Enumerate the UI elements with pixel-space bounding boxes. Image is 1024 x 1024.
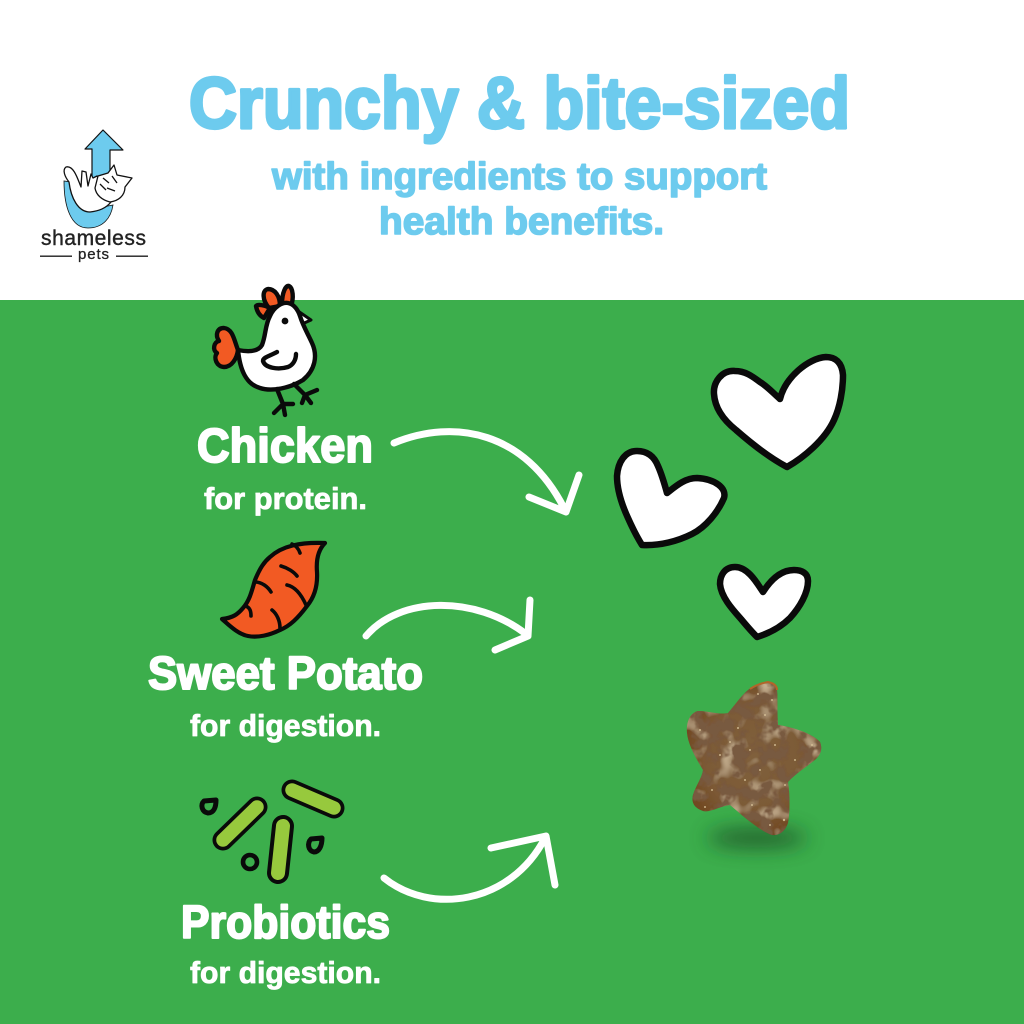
subheading line 2: health benefits.: [379, 201, 664, 243]
chicken legs: [274, 384, 317, 415]
arrow: sweet potato to hearts: [366, 600, 530, 650]
chicken comb petal 1: [264, 289, 280, 308]
label: probiotics: Probiotics: [181, 896, 390, 948]
label: for digestion: for digestion.: [190, 708, 381, 743]
chicken tail: [214, 328, 238, 367]
potato body: [222, 543, 325, 637]
icon: chicken: [214, 286, 317, 415]
kibble body: [687, 682, 821, 835]
chicken eye: [284, 320, 286, 322]
label: sweet potato: Sweet Potato: [148, 647, 423, 699]
hearts: [617, 357, 843, 637]
spore top left: [202, 800, 216, 813]
spore right: [309, 838, 322, 852]
cat head: [95, 165, 132, 202]
logo: wordmark shameless: shameless: [41, 227, 146, 250]
kibble shadow: [707, 828, 807, 848]
potato marks: [246, 544, 306, 628]
medium heart: [617, 451, 724, 545]
title: [189, 64, 850, 243]
bacterium rod 3: [278, 826, 283, 873]
bacterium rod 1: [292, 790, 334, 808]
heading: crunchy and bite-sized: Crunchy & bite-sized: [189, 64, 850, 144]
small heart: [720, 567, 808, 637]
icon: probiotics: [202, 790, 334, 873]
bacterium rod 2: [223, 807, 257, 840]
bacterium rod 1 fill: [292, 790, 334, 808]
label: chicken: Chicken: [197, 420, 373, 473]
label: for digestion: for digestion.: [190, 955, 381, 990]
kibble: star-shaped treat: [687, 682, 821, 835]
icon: sweet potato: [222, 543, 325, 637]
logo: wordmark pets: pets: [78, 246, 109, 263]
chicken beak: [298, 311, 311, 324]
kibble speckles: [699, 693, 813, 826]
arrow: chicken to hearts: [394, 432, 579, 512]
logo: blue U swoosh: [64, 181, 113, 228]
label: for protein: for protein.: [204, 481, 367, 516]
logo: rule left: [40, 256, 72, 257]
kibble crust edge: [750, 682, 777, 690]
bacterium rod 2 fill: [223, 807, 257, 840]
cat face marks: [100, 176, 117, 191]
subheading line 1: with ingredients to support: [271, 156, 767, 198]
bacterium rod 3 fill: [278, 826, 283, 873]
panel: green background: [0, 300, 1024, 1024]
logo: blue arrow: [85, 130, 123, 182]
cat body and tail: [64, 167, 111, 212]
chicken comb petal 3: [256, 305, 270, 318]
chicken comb petal 2: [282, 286, 293, 306]
spore bottom: [243, 855, 257, 869]
logo: shameless pets: [40, 130, 148, 263]
large heart: [714, 357, 843, 467]
logo: rule right: [116, 256, 148, 257]
chicken body: [238, 303, 315, 390]
arrow: probiotics to hearts: [384, 836, 555, 899]
logo: cat: [64, 165, 132, 212]
chicken wing: [263, 352, 296, 368]
